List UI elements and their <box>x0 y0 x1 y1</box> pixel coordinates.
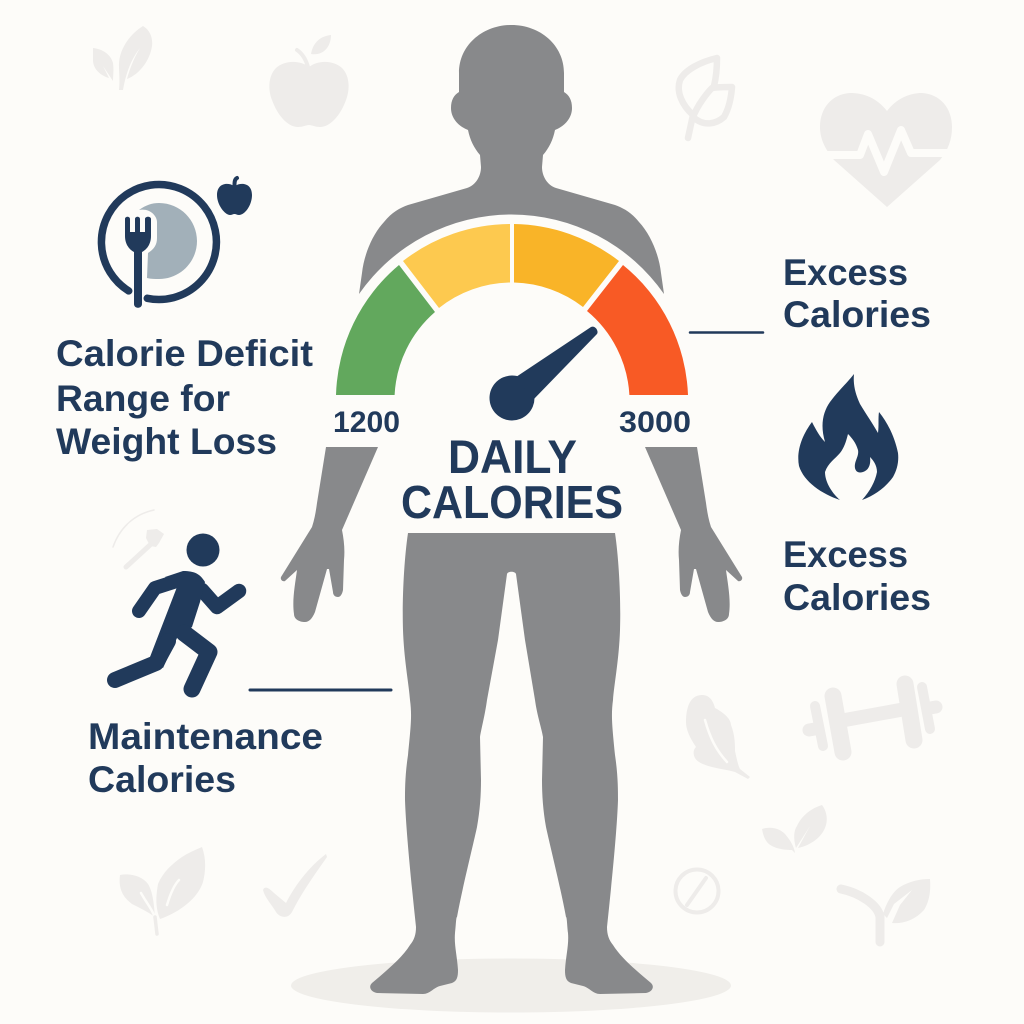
background icon: dumbbell <box>809 684 936 752</box>
small apple <box>217 178 252 215</box>
background icon: heart with pulse <box>818 93 955 207</box>
gauge needle <box>490 327 598 420</box>
legs <box>370 533 653 994</box>
right arm <box>645 447 742 622</box>
leader line: maintenance <box>250 688 391 692</box>
gauge segment: green <box>336 265 435 395</box>
background icon: oak leaf <box>686 695 750 779</box>
title <box>401 430 623 528</box>
background icon: sprout <box>841 879 930 942</box>
calorie gauge <box>336 224 688 420</box>
gauge segment: orange <box>514 224 619 307</box>
leader line: excess <box>690 331 763 334</box>
background icon: outlined leaf <box>679 58 732 138</box>
label: excess calories top <box>783 252 931 335</box>
label: calorie deficit <box>56 333 313 462</box>
gauge label: 1200: 1200 <box>333 406 400 439</box>
gauge segment: yellow <box>403 224 510 308</box>
label: calorie deficit: Range for <box>56 378 230 419</box>
icon: plate with fork and apple <box>101 178 252 308</box>
label: excess calories top: Calories <box>783 294 931 335</box>
background icon: leaf pair bottom left <box>120 847 205 934</box>
label: calorie deficit: Weight Loss <box>56 421 277 462</box>
label: excess calories bottom <box>783 534 931 618</box>
gauge label: 3000: 3000 <box>619 406 691 439</box>
title: DAILY <box>448 430 577 483</box>
label: maintenance calories <box>88 716 323 800</box>
head and shoulders <box>359 25 664 294</box>
background icon: hammer <box>113 510 164 567</box>
label: maintenance calories: Calories <box>88 759 236 800</box>
background icon: apple <box>269 35 349 127</box>
label: maintenance calories: Maintenance <box>88 716 323 757</box>
left arm <box>281 447 378 622</box>
plate ring <box>101 184 216 299</box>
background icon: leaf pair top left <box>93 26 152 90</box>
title: CALORIES <box>401 476 623 528</box>
icon: runner <box>115 534 239 689</box>
label: excess calories bottom: Excess <box>783 534 908 575</box>
background icon: small leaf pair <box>762 805 827 853</box>
label: calorie deficit: Calorie Deficit <box>56 333 313 374</box>
background icon: check mark <box>263 854 327 917</box>
icon: flame <box>798 374 898 500</box>
human silhouette <box>281 25 742 994</box>
label: excess calories top: Excess <box>783 252 908 293</box>
gauge segment: red <box>587 265 688 395</box>
label: excess calories bottom: Calories <box>783 577 931 618</box>
floor shadow <box>291 958 731 1012</box>
fork <box>125 217 151 308</box>
food on plate <box>139 203 197 279</box>
background icon: prohibited circle <box>676 870 718 912</box>
